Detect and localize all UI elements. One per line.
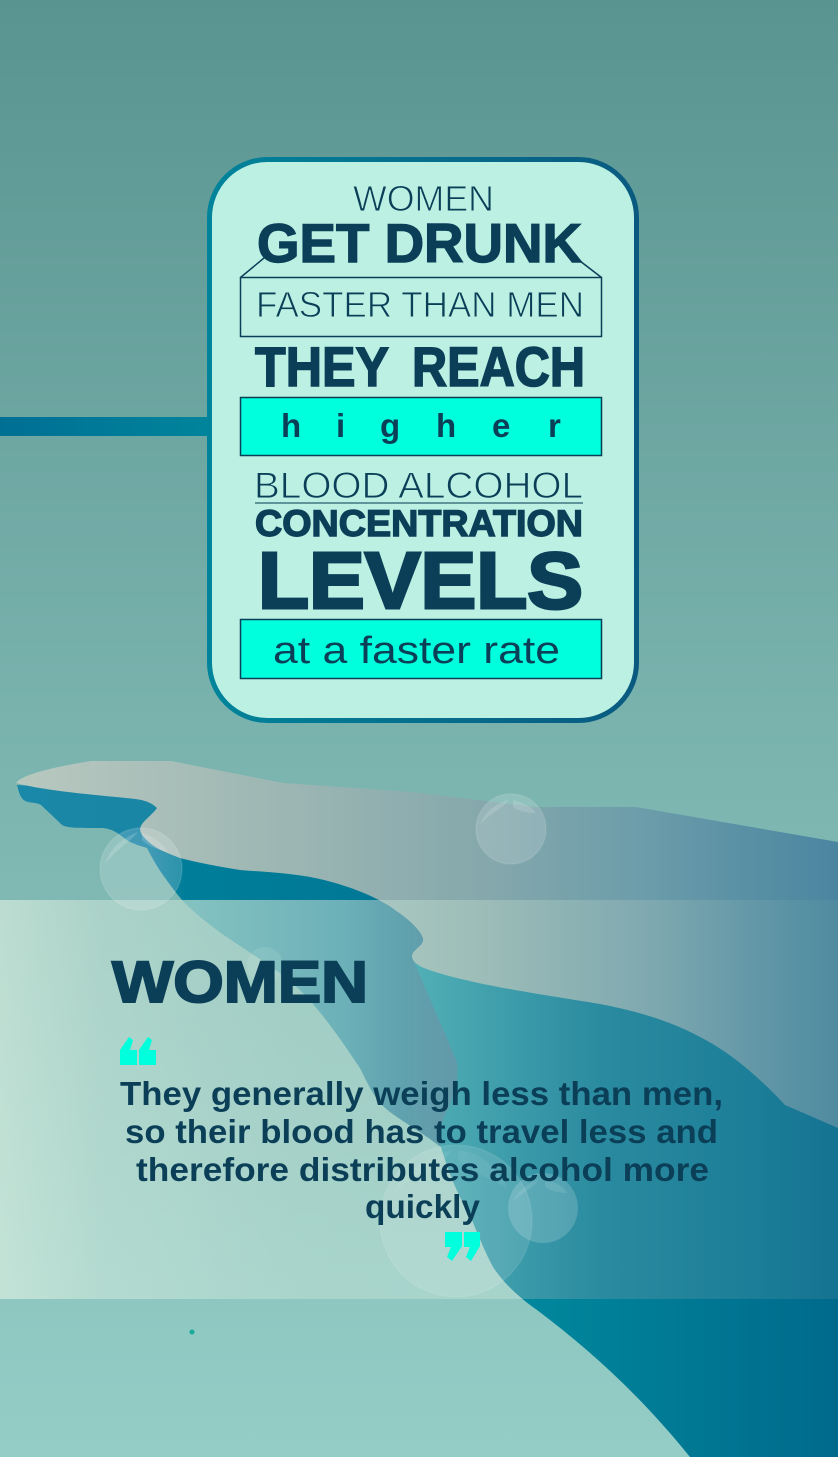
heading line: concentration: CONCENTRATION [255,503,583,544]
heading line: women: WOMEN [353,178,494,219]
connector bar [0,417,208,436]
icon: closing quote [445,1232,480,1261]
panel: headline card [210,160,636,720]
bubble: right lower [508,1173,578,1243]
box: higher [240,398,602,456]
quote text: quickly [365,1188,481,1225]
panel: translucent band [0,900,838,1299]
card background [210,160,636,720]
small dot [190,1330,194,1334]
box: at a faster rate: at a faster rate [273,630,560,672]
illustration: flowing landform [16,761,838,1457]
heading: women: WOMEN [112,950,368,1015]
quote text [120,1075,723,1225]
quote text: therefore distributes alcohol more [136,1151,709,1188]
icon: opening quote [120,1037,156,1065]
box: at a faster rate [240,620,602,678]
box: faster than men [240,258,602,336]
bubble: upper left [100,828,182,910]
quote text: so their blood has to travel less and [125,1113,718,1150]
box: higher: higher [281,407,561,444]
heading line: they reach: REACH [412,335,585,398]
box: faster than men: FASTER THAN MEN [256,284,584,325]
quote text: They generally weigh less than men, [120,1075,723,1112]
bubble: small behind heading [247,947,283,983]
heading line: they reach: THEY [255,335,389,398]
heading line: get drunk: GET DRUNK [257,212,582,274]
bubble: upper centre [476,794,546,864]
bubble: large lower [380,1145,532,1297]
heading line: they reach [255,335,585,398]
heading line: levels: LEVELS [258,536,583,625]
heading line: blood alcohol: BLOOD ALCOHOL [254,465,583,506]
